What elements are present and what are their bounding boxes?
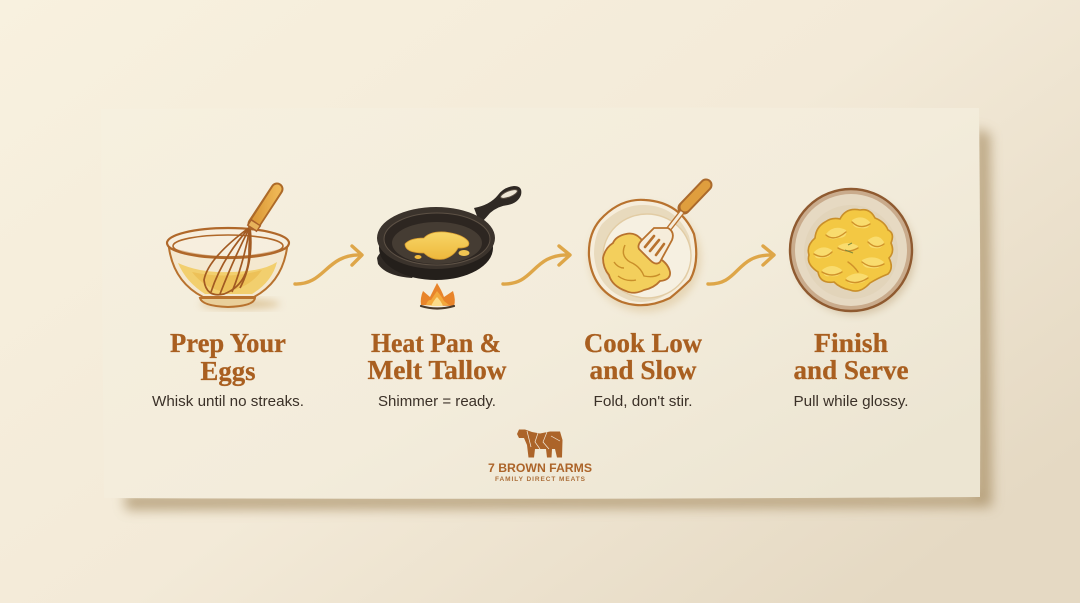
step 4 heading bbox=[794, 328, 909, 385]
logo: 7 Brown Farms: FAMILY DIRECT MEATS bbox=[495, 476, 586, 483]
step 3 heading: Cook Low bbox=[584, 328, 702, 358]
step 4 heading: Finish bbox=[814, 328, 888, 358]
arrow 2 bbox=[503, 246, 570, 284]
step 2 heading bbox=[368, 328, 507, 385]
step 1 heading: Prep Your bbox=[170, 328, 286, 358]
arrow 1 bbox=[295, 246, 362, 284]
step 2 caption: Shimmer = ready. bbox=[378, 393, 496, 410]
step 3 icon: plate, eggs and spatula bbox=[589, 185, 706, 312]
step 1 heading: Eggs bbox=[200, 356, 256, 386]
step 3 heading: and Slow bbox=[590, 355, 697, 385]
step 1 icon: bowl and whisk bbox=[167, 189, 289, 309]
card shadow bbox=[124, 128, 992, 510]
step 3 heading bbox=[584, 328, 702, 385]
step 2 heading: Melt Tallow bbox=[368, 355, 507, 385]
icon: cow bbox=[517, 430, 562, 458]
step 4 heading: and Serve bbox=[794, 355, 909, 385]
step 4 icon: plated scrambled eggs bbox=[790, 189, 915, 315]
logo: 7 Brown Farms bbox=[488, 430, 592, 483]
step 1 heading bbox=[170, 328, 286, 386]
step 3 caption: Fold, don't stir. bbox=[594, 393, 692, 410]
step 4 caption: Pull while glossy. bbox=[794, 393, 908, 410]
arrow 3 bbox=[708, 246, 774, 284]
logo: 7 Brown Farms: 7 BROWN FARMS bbox=[488, 463, 592, 475]
step 1 caption: Whisk until no streaks. bbox=[152, 393, 304, 410]
panel: recipe card bbox=[101, 108, 980, 499]
step 2 heading: Heat Pan & bbox=[371, 328, 501, 358]
step 2 icon: skillet and flame bbox=[377, 186, 521, 308]
